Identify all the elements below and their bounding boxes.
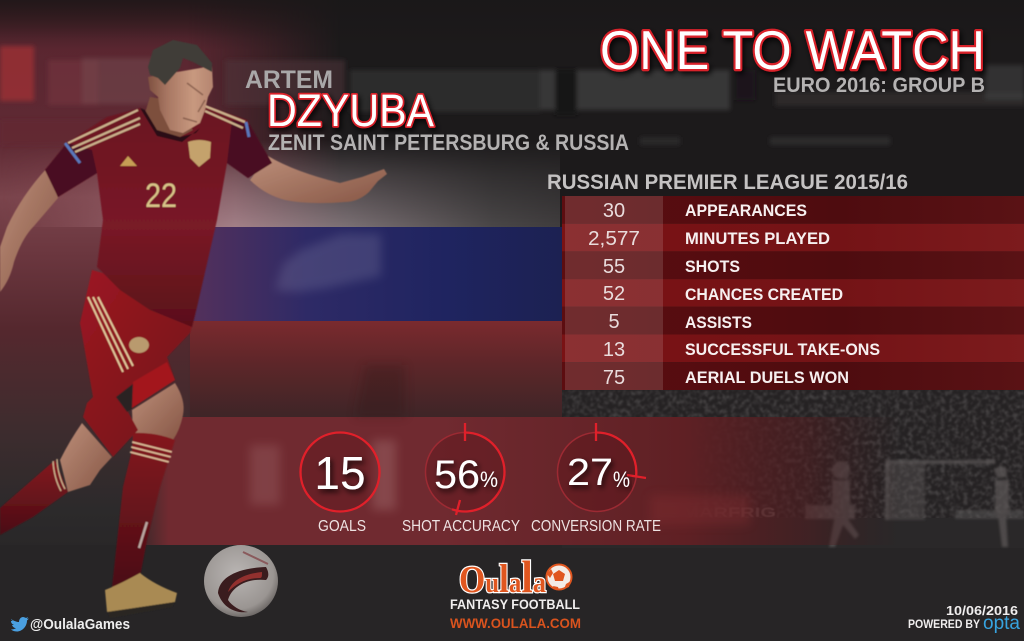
stats table: Russian Premier League: 55 xyxy=(603,256,625,278)
back sock xyxy=(0,460,68,535)
stats table: Russian Premier League: MINUTES PLAYED xyxy=(685,230,830,248)
date: 10/06/2016 xyxy=(946,604,1018,618)
shoulder stripes right xyxy=(205,106,245,128)
stat: goals xyxy=(300,432,380,535)
face xyxy=(148,66,213,133)
stat: goals: GOALS xyxy=(318,518,366,535)
opta logo: opta xyxy=(983,613,1020,634)
website: WWW.OULALA.COM xyxy=(450,615,581,631)
stats table: Russian Premier League: 5 xyxy=(608,311,620,333)
shorts xyxy=(80,270,198,457)
stats table: Russian Premier League: SHOTS xyxy=(685,258,740,276)
stats table: Russian Premier League: CHANCES CREATED xyxy=(685,286,843,304)
facial features xyxy=(183,83,205,122)
sleeve flag trim left xyxy=(65,143,80,163)
club and country: ZENIT SAINT PETERSBURG & RUSSIA xyxy=(268,130,629,155)
stat: goals: 15 xyxy=(314,447,366,499)
background: dark stadium: MARFRIG xyxy=(682,504,776,520)
shorts red cuff xyxy=(132,362,175,408)
sock logo xyxy=(139,522,147,548)
stats table: Russian Premier League: 13 xyxy=(603,339,625,361)
stats table: Russian Premier League: AERIAL DUELS WON xyxy=(685,369,849,387)
brand tagline: FANTASY FOOTBALL xyxy=(450,596,580,612)
stat: conversion rate: CONVERSION RATE xyxy=(531,518,661,535)
back thigh xyxy=(60,423,112,492)
player illustration xyxy=(0,40,387,618)
stat: conversion rate: 27 xyxy=(567,452,613,494)
stats table: Russian Premier League: APPEARANCES xyxy=(685,202,807,220)
sleeve dark shading xyxy=(45,120,272,197)
powered by: POWERED BY xyxy=(908,619,980,631)
sleeve flag trim right xyxy=(246,122,249,137)
Oulala logo: Oulala xyxy=(459,551,546,602)
crest on shirt xyxy=(188,140,211,167)
front sock stripes xyxy=(130,442,172,462)
stat: conversion rate xyxy=(531,423,661,535)
brand logo xyxy=(120,156,137,166)
stat: conversion rate: % xyxy=(613,467,630,492)
stats table: Russian Premier League: ASSISTS xyxy=(685,314,752,332)
shirt number: 22 xyxy=(145,177,177,215)
stats table: Russian Premier League xyxy=(562,196,1024,390)
front sock xyxy=(112,433,175,587)
left arm xyxy=(0,168,58,292)
boot studs xyxy=(108,602,175,618)
back sock stripes xyxy=(53,459,65,491)
shorts stripes xyxy=(88,297,133,372)
shirt xyxy=(45,104,272,327)
stats table: Russian Premier League: SUCCESSFUL TAKE-ONS xyxy=(685,341,880,359)
title: ONE TO WATCH xyxy=(600,19,985,81)
stat: shot accuracy: % xyxy=(480,467,498,492)
icon: twitter bird xyxy=(11,617,29,632)
stats table: Russian Premier League: 2,577 xyxy=(588,228,640,250)
stat: shot accuracy xyxy=(402,423,520,535)
table heading: RUSSIAN PREMIER LEAGUE 2015/16 xyxy=(547,171,908,194)
collar xyxy=(140,108,200,142)
front thigh and knee xyxy=(132,383,184,440)
stats table: Russian Premier League: 30 xyxy=(603,200,625,222)
shorts crest xyxy=(129,337,149,353)
player first name: ARTEM xyxy=(245,66,333,94)
stat: shot accuracy: SHOT ACCURACY xyxy=(402,518,520,535)
stats table: Russian Premier League: 52 xyxy=(603,283,625,305)
player surname: DZYUBA xyxy=(267,85,434,136)
neck xyxy=(145,97,193,137)
football xyxy=(204,545,278,617)
right arm xyxy=(250,156,387,203)
stats table: Russian Premier League: 75 xyxy=(603,367,625,389)
twitter handle: @OulalaGames xyxy=(30,617,130,633)
subtitle: EURO 2016: GROUP B xyxy=(773,74,985,97)
Russian flag bands xyxy=(0,140,900,545)
hair xyxy=(148,40,212,85)
boot xyxy=(105,573,177,612)
shoulder stripes left xyxy=(68,110,140,152)
thigh band xyxy=(116,380,138,412)
stat: shot accuracy: 56 xyxy=(434,453,480,497)
